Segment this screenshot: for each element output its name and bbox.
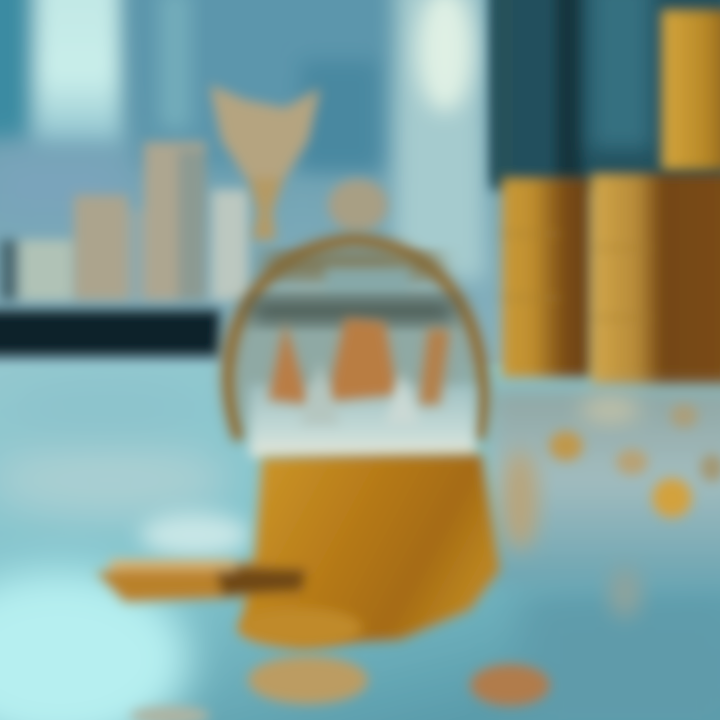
hourglass ornament <box>210 85 388 240</box>
background: sky <box>0 0 720 380</box>
coin stack: top right <box>662 10 720 170</box>
jar: golden base <box>240 454 500 645</box>
spoon handle <box>96 560 305 602</box>
table surface <box>0 364 720 720</box>
background: bright windows and wall panels <box>0 0 485 280</box>
background: dark right wall <box>490 0 720 190</box>
jar: glass dome <box>227 240 483 470</box>
coin stacks: right gold columns <box>500 174 720 386</box>
jar: orange chart peaks inside glass <box>250 318 475 457</box>
scattered coins and glass: lower right <box>490 388 720 618</box>
coins: bottom foreground <box>130 608 550 720</box>
skyline: blurred buildings <box>0 142 248 300</box>
dark horizon band <box>0 310 220 356</box>
